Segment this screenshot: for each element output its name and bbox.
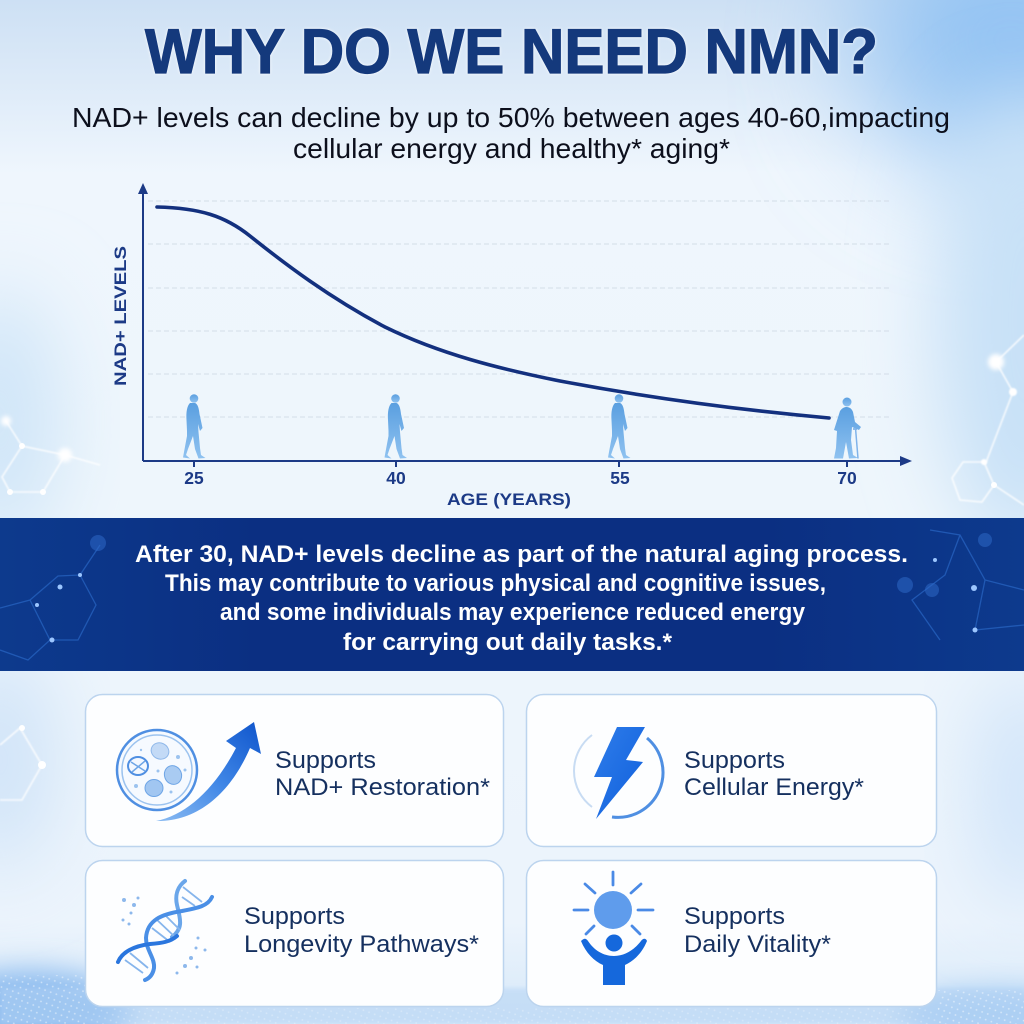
card text xyxy=(244,903,479,958)
x axis label: AGE (YEARS) xyxy=(447,490,571,509)
age labels: 40 xyxy=(386,468,406,488)
figure: age 55 xyxy=(608,394,630,458)
card text: Supports xyxy=(684,747,785,774)
banner text xyxy=(135,541,908,656)
icon: cell with rising arrow xyxy=(117,722,261,821)
card text xyxy=(684,747,864,801)
subtitle: cellular energy and healthy* aging* xyxy=(293,133,730,164)
figure: age 25 xyxy=(183,394,206,458)
card text: Cellular Energy* xyxy=(684,774,864,801)
decline curve xyxy=(157,207,829,418)
molecule decorations xyxy=(0,335,1024,800)
banner text: This may contribute to various physical and cognitive issues, xyxy=(165,570,826,597)
icon: sun and person xyxy=(574,872,653,985)
card text xyxy=(684,903,831,958)
card text: Supports xyxy=(684,903,785,930)
age labels: 25 xyxy=(184,468,204,488)
x axis xyxy=(143,456,912,467)
card: daily vitality xyxy=(526,860,936,1006)
subtitle: NAD+ levels can decline by up to 50% between ages 40-60,impacting xyxy=(72,102,950,133)
card: cellular energy xyxy=(526,694,936,846)
card: longevity pathways xyxy=(86,860,504,1006)
age labels: 55 xyxy=(610,468,630,488)
card text xyxy=(275,747,490,801)
age labels xyxy=(184,468,857,488)
icon: DNA helix xyxy=(118,881,212,980)
card text: Longevity Pathways* xyxy=(244,931,479,958)
card: NAD+ restoration xyxy=(86,694,504,846)
y axis label: NAD+ LEVELS xyxy=(111,246,130,386)
card text: Supports xyxy=(244,903,345,930)
card text: Supports xyxy=(275,747,376,774)
card text: Daily Vitality* xyxy=(684,931,831,958)
banner molecule decoration xyxy=(0,530,1024,660)
y axis xyxy=(138,183,148,461)
figure: age 40 xyxy=(384,394,407,458)
subtitle xyxy=(72,102,950,164)
age labels: 70 xyxy=(837,468,857,488)
title: WHY DO WE NEED NMN? xyxy=(145,17,878,87)
figure: age 70 with cane xyxy=(834,398,861,458)
banner text: and some individuals may experience reduced energy xyxy=(220,599,805,626)
banner text: After 30, NAD+ levels decline as part of the natural aging process. xyxy=(135,541,908,568)
banner xyxy=(0,518,1024,671)
icon: lightning bolt xyxy=(574,727,663,819)
line chart: NAD+ levels by age xyxy=(111,183,912,509)
banner text: for carrying out daily tasks.* xyxy=(343,629,672,656)
card text: NAD+ Restoration* xyxy=(275,774,490,801)
